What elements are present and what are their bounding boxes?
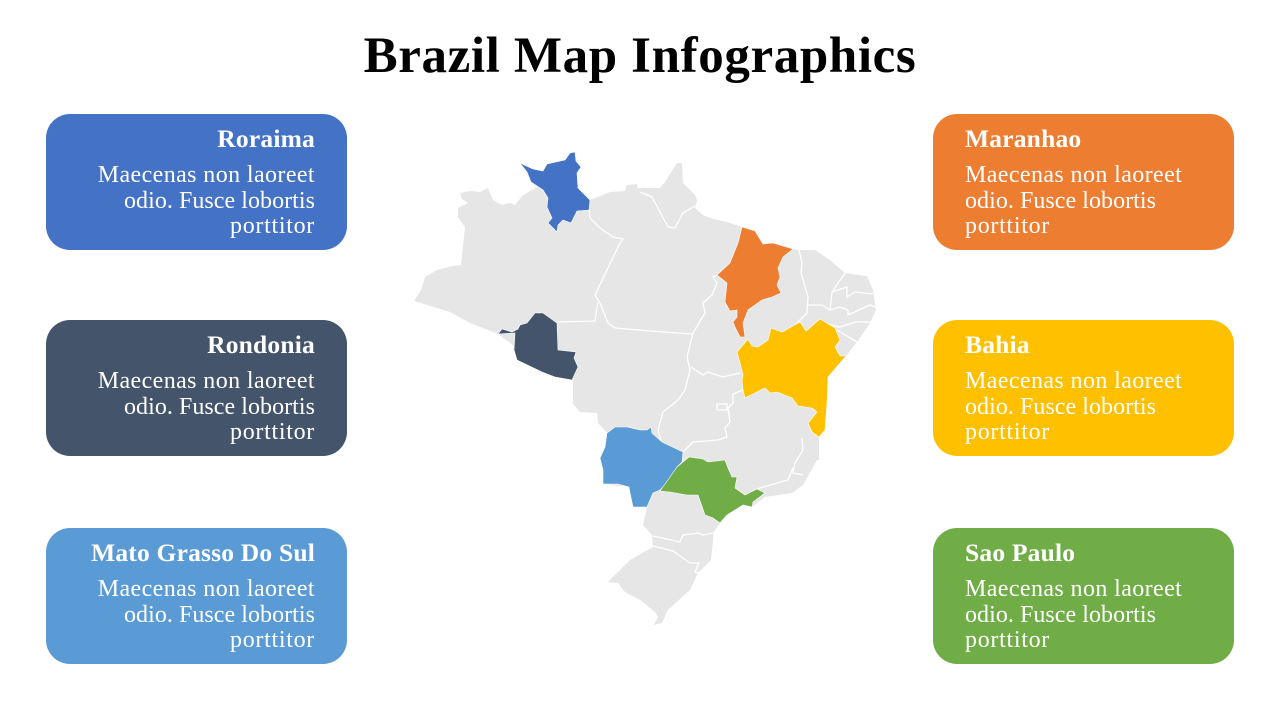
- text: Bahia description: [965, 368, 1182, 445]
- text: Maranhao description: [965, 162, 1182, 239]
- panel: Sao Paulo: [933, 528, 1234, 664]
- text: Roraima description: Maecenas non laoreet: [98, 162, 315, 188]
- text: Rondonia description: [98, 368, 315, 445]
- title: Brazil Map Infographics: [364, 28, 916, 84]
- text: Sao Paulo description: odio. Fusce lobortis: [965, 602, 1156, 628]
- heading: Sao Paulo: Sao Paulo: [965, 538, 1075, 567]
- heading: Roraima: Roraima: [217, 124, 315, 153]
- text: Rondonia description: odio. Fusce lobortis: [124, 394, 315, 420]
- panel: Maranhao: [933, 114, 1234, 250]
- text: Rondonia description: porttitor: [230, 419, 315, 445]
- text: Roraima description: [98, 162, 315, 239]
- text: Mato Grosso Do Sul description: Maecenas non laoreet: [98, 576, 315, 602]
- text: Mato Grosso Do Sul description: odio. Fusce lobortis: [124, 602, 315, 628]
- text: Roraima description: odio. Fusce lobortis: [124, 188, 315, 214]
- heading: Bahia: Bahia: [965, 330, 1030, 359]
- text: Maranhao description: Maecenas non laoreet: [965, 162, 1182, 188]
- heading: Rondonia: Rondonia: [207, 330, 315, 359]
- text: Mato Grosso Do Sul description: porttitor: [230, 627, 315, 653]
- text: Bahia description: Maecenas non laoreet: [965, 368, 1182, 394]
- text: Sao Paulo description: porttitor: [965, 627, 1050, 653]
- map: Mato Grosso do Sul state: [600, 427, 683, 507]
- map: Maranhao state: [717, 227, 793, 337]
- panel: Mato Grosso Do Sul: [46, 528, 347, 664]
- text: Bahia description: porttitor: [965, 419, 1050, 445]
- text: Maranhao description: odio. Fusce lobortis: [965, 188, 1156, 214]
- map: Sao Paulo state: [660, 457, 765, 523]
- heading: Maranhao: Maranhao: [965, 124, 1081, 153]
- text: Maranhao description: porttitor: [965, 213, 1050, 239]
- map: gray country base: [414, 163, 876, 625]
- text: Sao Paulo description: Maecenas non laoreet: [965, 576, 1182, 602]
- panel: Rondonia: [46, 320, 347, 456]
- text: Roraima description: porttitor: [230, 213, 315, 239]
- text: Bahia description: odio. Fusce lobortis: [965, 394, 1156, 420]
- text: Rondonia description: Maecenas non laoreet: [98, 368, 315, 394]
- map: Rondonia state: [498, 313, 578, 380]
- map: internal state borders: [558, 192, 876, 573]
- panel: Roraima: [46, 114, 347, 250]
- panel: Bahia: [933, 320, 1234, 456]
- map: Bahia state: [737, 319, 846, 437]
- map: Roraima state: [520, 152, 590, 232]
- text: Sao Paulo description: [965, 576, 1182, 653]
- heading: Mato Grosso Do Sul: Mato Grasso Do Sul: [91, 538, 315, 567]
- text: Mato Grosso Do Sul description: [98, 576, 315, 653]
